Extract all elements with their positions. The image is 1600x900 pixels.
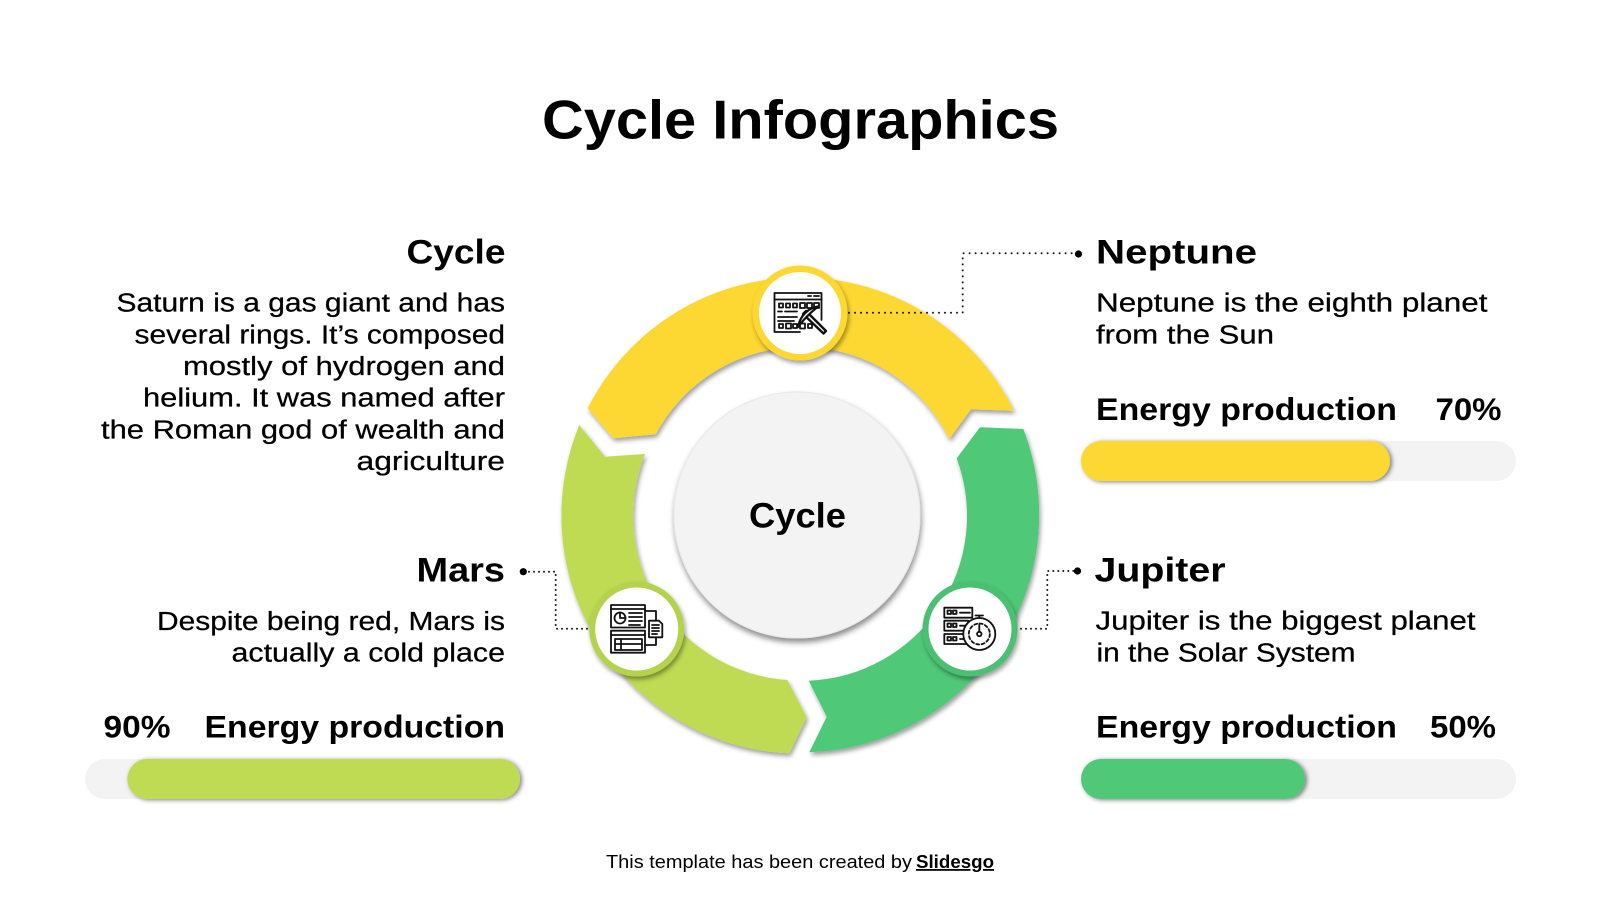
body text: Jupiter xyxy=(1096,607,1476,667)
body text: Saturn: the Roman god of wealth and xyxy=(101,416,505,444)
ring segment: yellow xyxy=(588,277,1014,439)
body text: Saturn: agriculture xyxy=(356,448,505,476)
body text: Saturn: Saturn is a gas giant and has xyxy=(116,290,505,318)
icon: light green badge with report windows xyxy=(589,582,684,676)
icon: yellow badge with pickaxe window xyxy=(752,266,848,360)
body text: Jupiter: in the Solar System xyxy=(1096,639,1356,667)
energy label: Mars xyxy=(104,708,505,744)
energy label: Neptune xyxy=(1096,391,1502,427)
panel: Jupiter xyxy=(1081,552,1516,799)
body text: Saturn xyxy=(101,290,506,476)
heading: Cycle: Cycle xyxy=(406,233,506,271)
body text: Saturn: several rings. It’s composed xyxy=(134,321,505,349)
body text: Neptune xyxy=(1096,290,1488,349)
body text: Saturn: mostly of hydrogen and xyxy=(183,353,505,381)
panel: Cycle text xyxy=(101,233,506,476)
progress bar: Mars 90% xyxy=(85,759,520,799)
progress bar: Jupiter 50% xyxy=(1081,759,1516,799)
ring segment: dark green xyxy=(809,427,1039,752)
title: Cycle Infographics xyxy=(542,88,1059,150)
connector: Neptune xyxy=(843,250,1082,313)
heading: Neptune: Neptune xyxy=(1096,233,1257,271)
energy label: Neptune: Energy production xyxy=(1096,391,1397,427)
progress bar: Neptune 70% xyxy=(1081,441,1516,481)
energy label: Mars: Energy production xyxy=(204,708,505,744)
center circle: Cycle xyxy=(749,496,846,536)
energy label: Jupiter: 50% xyxy=(1430,708,1496,744)
body text: Mars xyxy=(157,608,505,668)
footer credit: Slidesgo xyxy=(916,852,994,872)
body text: Neptune: Neptune is the eighth planet xyxy=(1096,290,1488,318)
footer credit: This template has been created by xyxy=(606,852,912,872)
body text: Saturn: helium. It was named after xyxy=(143,385,506,413)
heading: Jupiter: Jupiter xyxy=(1094,552,1226,590)
body text: Mars: actually a cold place xyxy=(232,640,505,668)
heading: Mars: Mars xyxy=(416,552,505,590)
cycle diagram xyxy=(561,277,1039,753)
connector: Mars xyxy=(520,568,592,629)
panel: Neptune xyxy=(1081,233,1516,481)
connector: Jupiter xyxy=(1016,567,1081,629)
energy label: Jupiter: Energy production xyxy=(1096,708,1397,744)
center circle xyxy=(674,392,920,638)
body text: Neptune: from the Sun xyxy=(1096,321,1274,349)
panel: Mars xyxy=(85,552,520,799)
energy label: Neptune: 70% xyxy=(1436,391,1502,427)
energy label: Mars: 90% xyxy=(104,708,170,744)
body text: Jupiter: Jupiter is the biggest planet xyxy=(1096,607,1476,635)
body text: Mars: Despite being red, Mars is xyxy=(157,608,505,636)
ring segment: light green xyxy=(561,425,807,753)
icon: dark green badge with server stopwatch xyxy=(922,582,1018,676)
